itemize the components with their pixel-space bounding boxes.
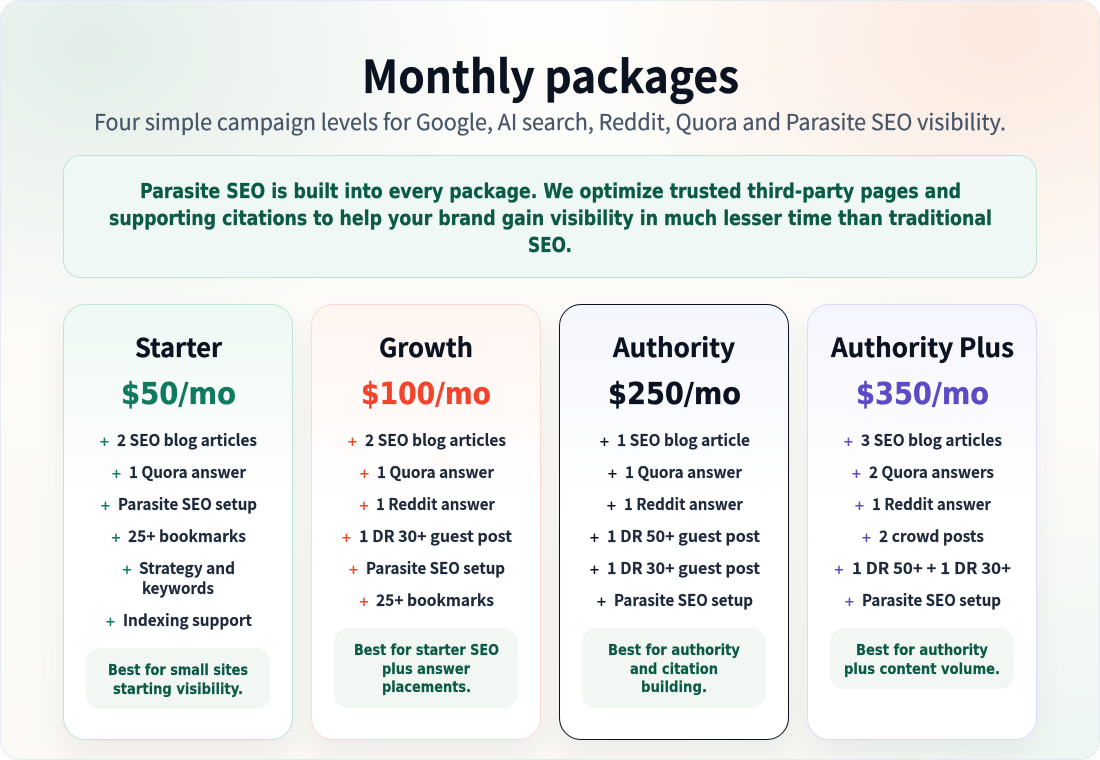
feature list: + xyxy=(347,435,358,450)
feature list: 1 DR 30+ guest post xyxy=(359,523,512,547)
feature list: + xyxy=(110,531,121,546)
feature list: + xyxy=(341,531,352,546)
feature list: 2 crowd posts xyxy=(879,523,984,547)
subtitle: Four simple campaign levels for Google, AI search, Reddit, Quora and Parasite SEO visibility. xyxy=(94,105,1006,137)
best-for note: plus answer xyxy=(382,660,471,678)
feature list: 2 SEO blog articles xyxy=(365,427,506,451)
feature list: + xyxy=(589,563,600,578)
feature list: Indexing support xyxy=(123,607,252,631)
plan name: Starter: Starter xyxy=(135,328,223,365)
price: $100/mo: $100/mo xyxy=(361,377,491,412)
best-for note: and citation xyxy=(630,660,718,678)
price: $350/mo: $350/mo xyxy=(856,377,989,412)
price: $250/mo: $250/mo xyxy=(608,377,741,412)
feature list: Parasite SEO setup xyxy=(118,491,257,515)
title: Monthly packages xyxy=(362,41,739,106)
best-for note: starting visibility. xyxy=(113,680,243,698)
feature list: + xyxy=(358,595,369,610)
feature list: + xyxy=(348,563,359,578)
panel: Authority Plus package xyxy=(807,304,1037,740)
feature list: 2 SEO blog articles xyxy=(117,427,257,451)
feature list: + xyxy=(607,467,618,482)
feature list: 3 SEO blog articles xyxy=(861,427,1002,451)
best-for note: building. xyxy=(641,678,707,696)
feature list: 1 Reddit answer xyxy=(376,491,495,515)
feature list: 1 SEO blog article xyxy=(617,427,750,451)
feature list: + xyxy=(844,595,855,610)
feature list: + xyxy=(843,435,854,450)
feature list: 1 Quora answer xyxy=(625,459,742,483)
banner: Parasite SEO callout: supporting citations to help your brand gain visibility in much lesser time than traditional xyxy=(109,206,992,230)
feature list: + xyxy=(100,499,111,514)
feature list: + xyxy=(99,435,110,450)
best-for note: Best for authority xyxy=(856,641,988,659)
feature list: + xyxy=(122,563,132,578)
price: $50/mo: $50/mo xyxy=(121,377,236,412)
feature list: 1 Reddit answer xyxy=(624,491,743,515)
best-for note: Best for starter SEO xyxy=(354,641,499,659)
panel: Authority package xyxy=(559,304,789,740)
feature list: 25+ bookmarks xyxy=(376,587,494,611)
banner: Parasite SEO callout xyxy=(63,155,1037,278)
best-for note xyxy=(582,628,766,708)
best-for note xyxy=(334,628,518,708)
best-for note: Best for authority xyxy=(608,641,740,659)
feature list: Parasite SEO setup xyxy=(366,555,505,579)
feature list: 1 Quora answer xyxy=(129,459,246,483)
banner: Parasite SEO callout: Parasite SEO is built into every package. We optimize trusted third-party pages and xyxy=(140,179,961,203)
panel: Starter package xyxy=(63,304,293,740)
feature list: Parasite SEO setup xyxy=(862,587,1001,611)
feature list xyxy=(341,427,512,611)
banner: Parasite SEO callout: SEO. xyxy=(528,233,572,257)
feature list: 1 Reddit answer xyxy=(872,491,991,515)
best-for note: placements. xyxy=(382,678,471,696)
feature list: 1 DR 30+ guest post xyxy=(607,555,760,579)
best-for note xyxy=(830,628,1014,689)
feature list: 2 Quora answers xyxy=(869,459,994,483)
feature list: + xyxy=(834,563,844,578)
feature list: keywords xyxy=(142,575,214,599)
feature list xyxy=(834,427,1011,611)
feature list: + xyxy=(596,595,607,610)
feature list: 1 Quora answer xyxy=(377,459,494,483)
feature list: + xyxy=(359,467,370,482)
feature list xyxy=(99,427,257,631)
panel: Growth package xyxy=(311,304,541,740)
feature list: + xyxy=(854,499,865,514)
feature list: 1 DR 50+ + 1 DR 30+ xyxy=(852,555,1011,579)
plan name: Authority Plus: Authority Plus xyxy=(830,328,1014,365)
feature list: Parasite SEO setup xyxy=(614,587,753,611)
feature list: + xyxy=(589,531,600,546)
header: title and subtitle xyxy=(94,41,1006,137)
feature list: + xyxy=(606,499,617,514)
feature list: + xyxy=(861,531,872,546)
feature list: + xyxy=(358,499,369,514)
feature list: + xyxy=(599,435,610,450)
feature list: 25+ bookmarks xyxy=(128,523,246,547)
best-for note: Best for small sites xyxy=(108,661,248,679)
plan name: Authority: Authority xyxy=(612,328,735,365)
best-for note xyxy=(86,648,270,709)
feature list: Strategy and xyxy=(139,555,235,579)
best-for note: plus content volume. xyxy=(844,660,1000,678)
feature list: + xyxy=(105,615,116,630)
feature list: + xyxy=(851,467,862,482)
feature list: 1 DR 50+ guest post xyxy=(607,523,760,547)
plan name: Growth: Growth xyxy=(379,328,473,365)
feature list: + xyxy=(111,467,122,482)
feature list xyxy=(589,427,760,611)
